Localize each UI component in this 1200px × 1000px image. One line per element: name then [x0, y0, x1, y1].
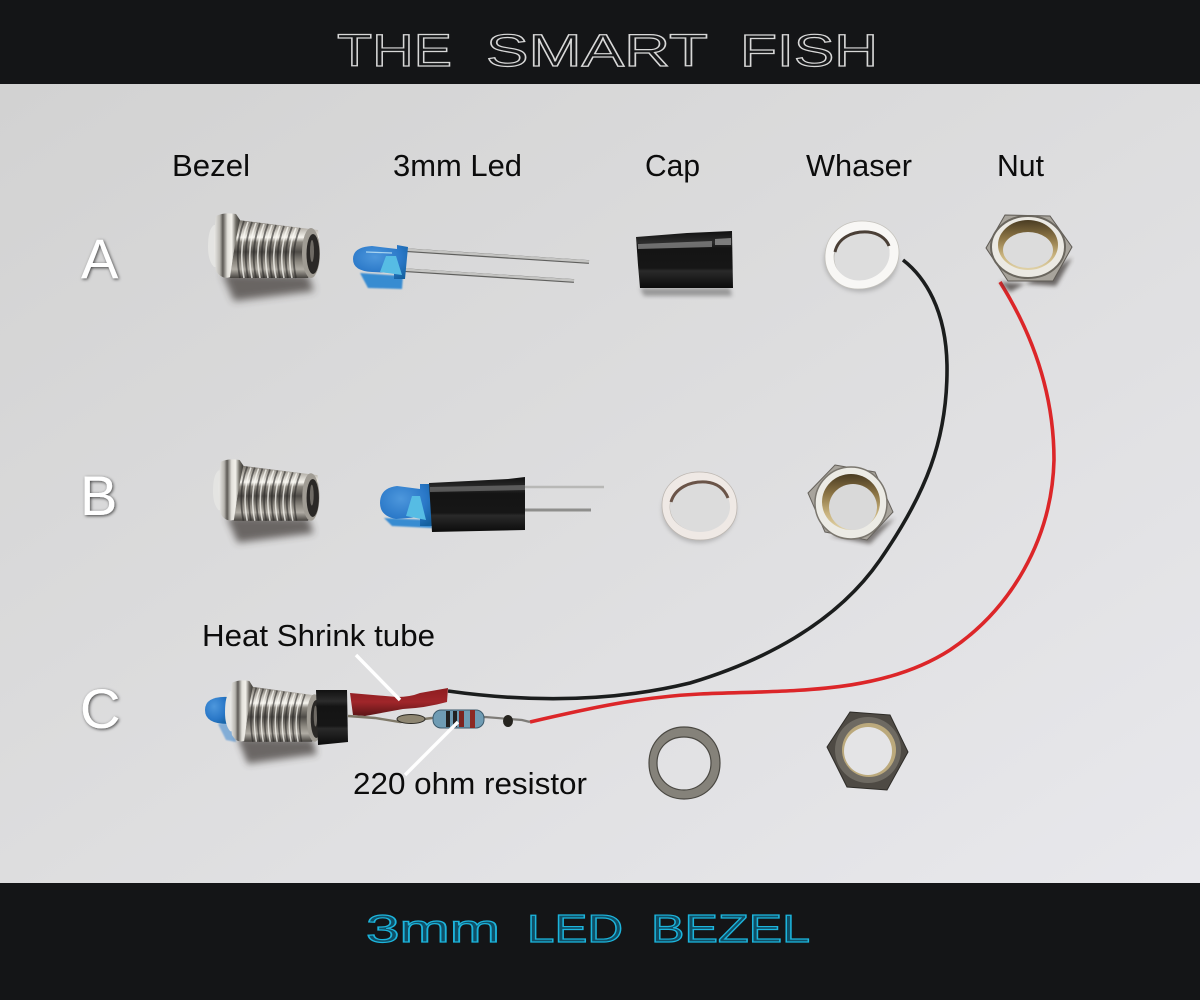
subtitle: [366, 908, 810, 951]
row B nut: [808, 465, 895, 544]
row C washer: [649, 727, 720, 799]
photo background panel: [0, 84, 1200, 883]
header bar: [0, 0, 1200, 84]
black wire: [448, 260, 947, 699]
column labels: Nut: [997, 148, 1044, 183]
row B washer: [662, 472, 737, 543]
LED leads: [402, 250, 589, 281]
column labels: [172, 148, 1044, 183]
solder lead: [348, 716, 432, 722]
callout: 220 ohm resistor: 220 ohm resistor: [353, 766, 587, 801]
shadow: [824, 228, 898, 292]
title: THE: [337, 25, 452, 76]
column labels: Whaser: [806, 148, 912, 183]
title: FISH: [740, 25, 878, 76]
reflection: [384, 518, 432, 528]
shadow: [662, 477, 736, 543]
callout: 220 ohm resistor: [353, 722, 587, 801]
row A bezel: [208, 213, 320, 301]
subtitle: LED: [527, 908, 623, 951]
column labels: Cap: [645, 148, 700, 183]
red wire: [530, 282, 1054, 722]
row B bezel: [213, 459, 319, 543]
subtitle: 3mm: [366, 908, 500, 951]
callout: heat shrink tube: Heat Shrink tube: [202, 618, 435, 653]
column labels: 3mm Led: [393, 148, 522, 183]
row B LED assembly: [380, 477, 604, 532]
callout: heat shrink tube: [202, 618, 435, 700]
black cap: [429, 477, 525, 532]
row C assembled bezel: [205, 680, 530, 764]
resistor: [432, 710, 530, 728]
leads: [524, 486, 604, 488]
LED reflection: [360, 273, 403, 289]
lens: [380, 484, 432, 526]
row letter C: C: [80, 677, 120, 740]
blue LED tip: [205, 697, 228, 724]
black insulator: [316, 690, 348, 745]
title: [337, 25, 878, 76]
title: SMART: [486, 25, 708, 76]
row letter B: B: [80, 464, 117, 527]
row letter A: A: [81, 227, 119, 290]
row A washer: [824, 221, 899, 292]
LED body: [353, 245, 408, 279]
row C nut: [827, 712, 908, 790]
column labels: Bezel: [172, 148, 250, 183]
threaded body: [225, 680, 322, 764]
ring: [825, 221, 899, 289]
heat shrink tube: [350, 688, 448, 716]
row A LED: [353, 245, 589, 289]
row A nut: [986, 215, 1072, 292]
subtitle: BEZEL: [651, 908, 810, 951]
footer bar: [0, 883, 1200, 1000]
row A cap: [636, 231, 733, 296]
